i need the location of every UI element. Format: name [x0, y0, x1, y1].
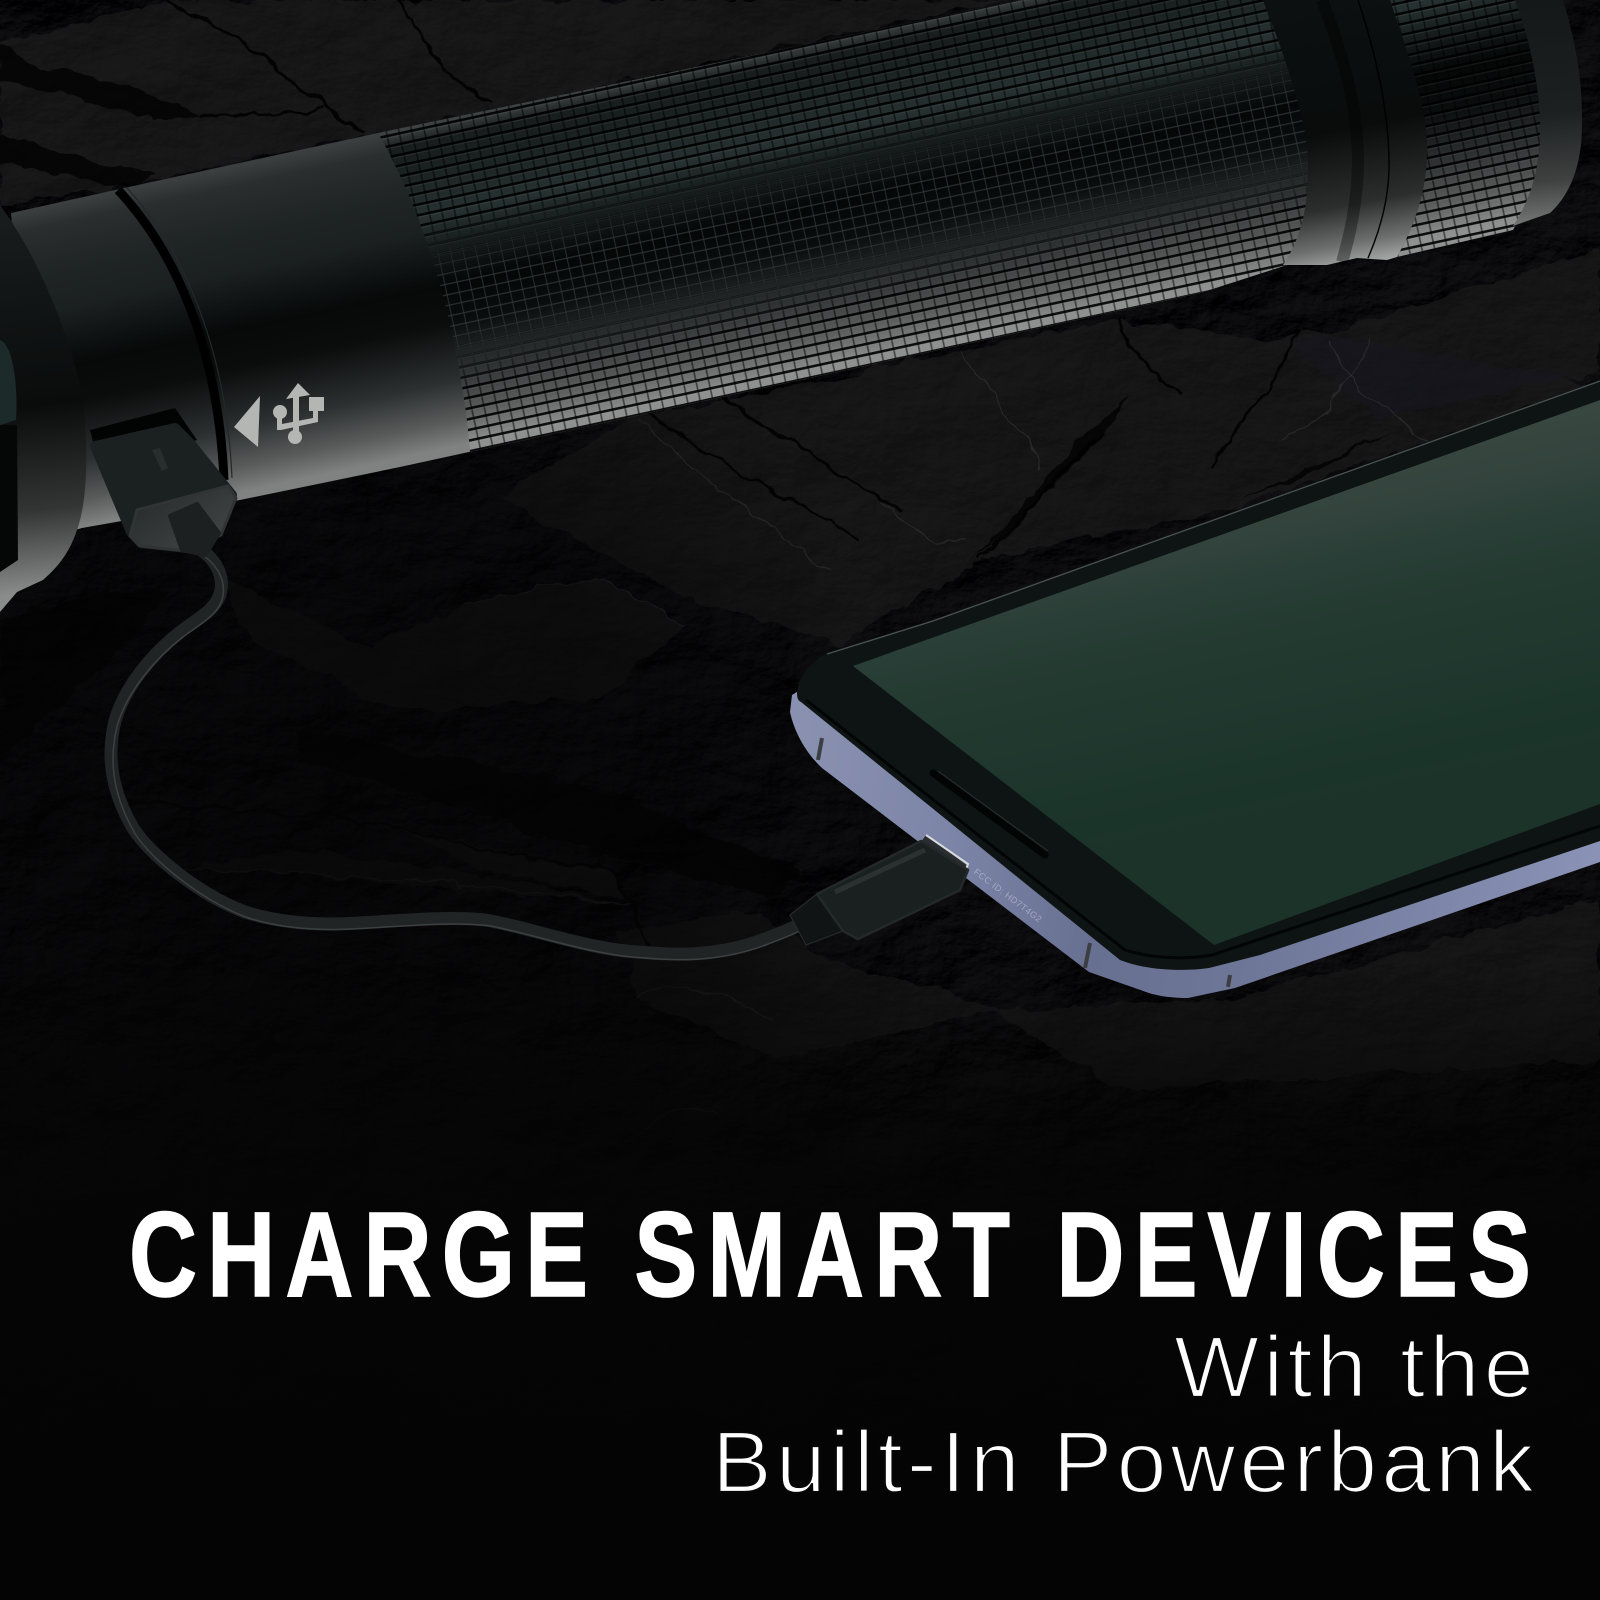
antenna bands — [818, 738, 1230, 987]
regulatory text: FCC ID: HD7T4G2 — [972, 867, 1044, 925]
flashlight — [0, 0, 1582, 612]
knurled grip — [378, 0, 1308, 452]
smartphone — [790, 380, 1600, 998]
rock shadow pockets — [0, 47, 1400, 900]
socket opening — [90, 408, 197, 470]
glass front — [797, 380, 1600, 970]
usb direction arrow — [234, 396, 260, 447]
subtitle line 1: With the — [1174, 1319, 1538, 1416]
tail end cap — [1513, 0, 1582, 226]
usb-a plug — [95, 428, 236, 555]
flashlight body tube — [11, 0, 1307, 540]
glass rim highlight — [827, 381, 1600, 654]
tail cap knurl — [1390, 0, 1540, 257]
head collar — [0, 205, 86, 612]
charging cable — [111, 548, 802, 960]
usb symbol — [273, 383, 324, 444]
screen — [853, 400, 1600, 945]
rock facets — [0, 0, 1600, 1090]
groove ring — [118, 188, 232, 480]
metal side — [790, 690, 1600, 998]
glass bottom bevel — [806, 700, 1600, 958]
rock cracks — [128, 0, 1300, 950]
usb-c plug — [790, 835, 968, 945]
speaker slot — [933, 771, 1048, 855]
subtitle line 2: Built-In Powerbank — [712, 1414, 1538, 1511]
tail neck rings — [1263, 0, 1427, 265]
